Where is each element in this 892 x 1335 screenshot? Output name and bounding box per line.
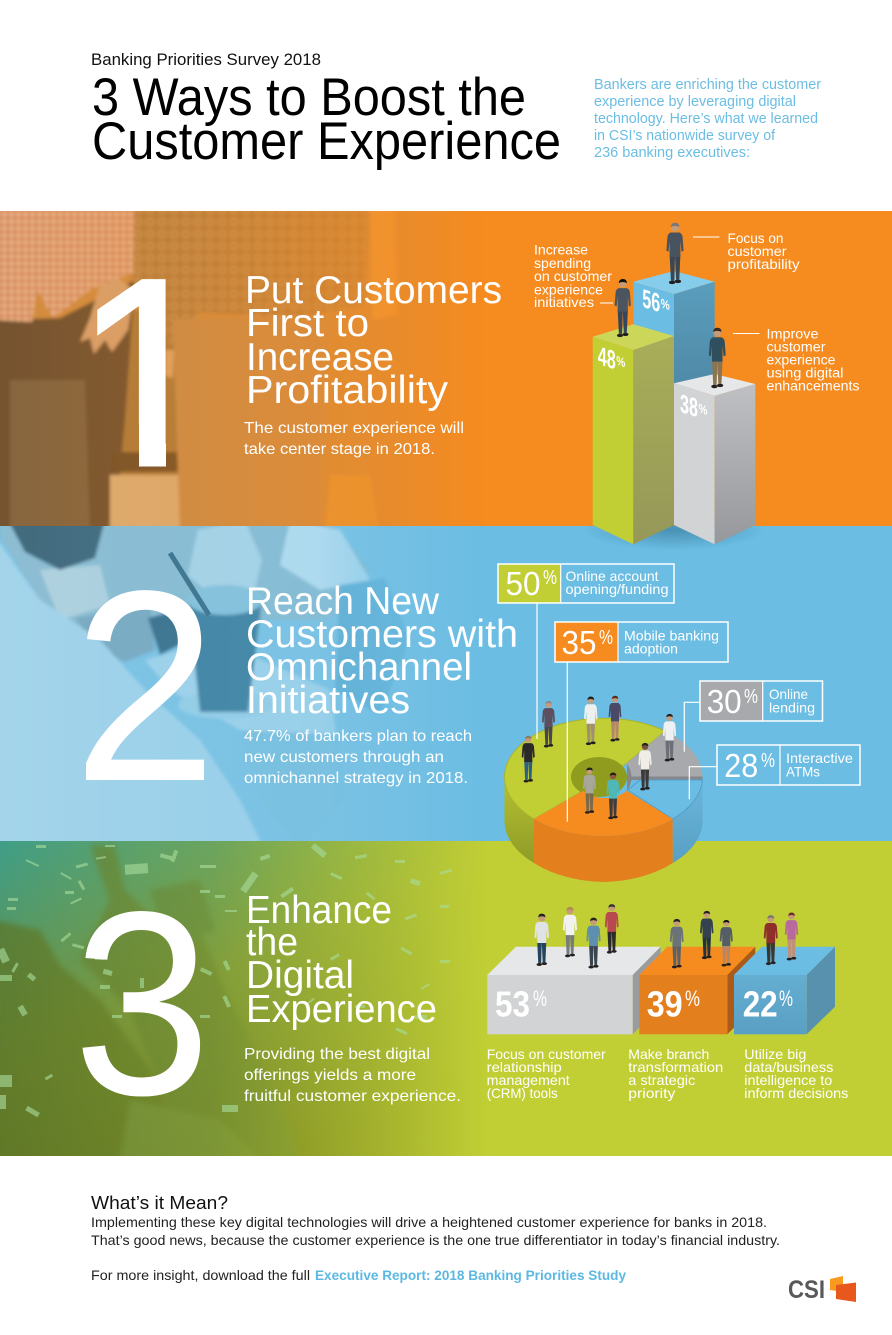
panel: section 3 green bbox=[0, 841, 892, 1160]
heading 1: Increase bbox=[246, 336, 394, 379]
caption: big data bbox=[744, 1046, 848, 1101]
block: 53 percent grey bbox=[487, 947, 661, 1034]
callout: 28 percent: Interactive bbox=[786, 750, 853, 766]
bar: 48 percent green: % bbox=[616, 353, 625, 370]
panel: section 2 blue bbox=[0, 520, 892, 850]
heading 1 bbox=[245, 269, 502, 412]
footer heading: What’s it Mean? bbox=[91, 1193, 228, 1213]
subheading 2: new customers through an bbox=[244, 749, 444, 766]
heading 3: the bbox=[246, 921, 298, 964]
callout: 30 percent: % bbox=[744, 686, 758, 708]
heading 2: Reach New bbox=[246, 580, 440, 623]
confetti bbox=[0, 843, 452, 1117]
caption: CRM tools: (CRM) tools bbox=[487, 1085, 558, 1101]
heading 2 bbox=[246, 580, 518, 722]
callout: focus on profitability: Focus on bbox=[728, 230, 784, 246]
numeral 3: 3 bbox=[73, 857, 211, 1150]
people on pie bbox=[522, 696, 676, 819]
pie hole bbox=[571, 757, 632, 797]
title bbox=[92, 68, 561, 171]
callout: 35 percent: 35 bbox=[562, 624, 596, 661]
bar: 38 percent grey: % bbox=[698, 401, 708, 418]
person: woman on green bar bbox=[615, 279, 631, 337]
pie chart: section 2 bbox=[498, 564, 860, 882]
heading 3: Experience bbox=[246, 988, 437, 1031]
heading 1: Profitability bbox=[246, 369, 449, 412]
callout: 50 percent: Online account bbox=[566, 568, 659, 584]
caption: branch transformation: Make branch bbox=[628, 1046, 709, 1062]
intro text: Bankers are enriching the customer bbox=[594, 77, 821, 93]
intro text: 236 banking executives: bbox=[594, 145, 750, 161]
caption: big data: intelligence to bbox=[744, 1072, 833, 1088]
footer body: Implementing these key digital technologies will drive a heightened customer experience for banks in 2018. bbox=[91, 1214, 767, 1230]
subheading 3: Providing the best digital bbox=[244, 1046, 430, 1063]
callout: 30 percent bbox=[700, 681, 822, 721]
call to action: Executive Report: 2018 Banking Priorities Study bbox=[315, 1267, 626, 1283]
caption: big data: inform decisions bbox=[744, 1085, 848, 1101]
bar: 56 percent blue bbox=[633, 271, 715, 400]
caption: branch transformation: transformation bbox=[628, 1059, 723, 1075]
caption: big data: data/business bbox=[744, 1059, 833, 1075]
panel: section 1 orange bbox=[0, 205, 892, 535]
intro text: experience by leveraging digital bbox=[594, 94, 796, 110]
callout: increase spending: spending bbox=[534, 255, 591, 271]
heading 3: Enhance bbox=[246, 889, 392, 932]
subheading 2 bbox=[244, 728, 472, 787]
subheading 1 bbox=[244, 420, 464, 458]
heading 1: Put Customers bbox=[245, 269, 502, 312]
heading 2: Customers with bbox=[246, 613, 518, 656]
intro text: in CSI’s nationwide survey of bbox=[594, 128, 776, 144]
caption: CRM tools: relationship bbox=[487, 1059, 562, 1075]
header bbox=[91, 50, 821, 171]
logo: CSI: CSI bbox=[788, 1276, 825, 1304]
heading 1: First to bbox=[246, 302, 369, 345]
callout: 50 percent: 50 bbox=[506, 565, 540, 602]
subheading 1: take center stage in 2018. bbox=[244, 441, 435, 458]
block: 53 percent grey: % bbox=[533, 986, 547, 1011]
intro text: technology. Here’s what we learned bbox=[594, 111, 818, 127]
intro text bbox=[594, 77, 821, 161]
heading 2: Initiatives bbox=[246, 679, 410, 722]
block: 39 percent orange: 39 bbox=[647, 984, 683, 1024]
callout: increase spending: Increase bbox=[534, 242, 588, 258]
block: 53 percent grey: 53 bbox=[495, 984, 530, 1024]
connector lines bbox=[537, 603, 717, 822]
callout: 28 percent: 28 bbox=[724, 747, 758, 784]
pie body bbox=[504, 777, 702, 882]
photo backdrop: two people standing bbox=[0, 205, 892, 535]
footer bbox=[91, 1193, 856, 1304]
callout: 30 percent: lending bbox=[769, 700, 815, 716]
block: 39 percent orange: % bbox=[685, 986, 700, 1011]
block: 22 percent blue: 22 bbox=[743, 984, 778, 1024]
callout: increase spending: initiatives bbox=[534, 294, 594, 310]
subheading 3: fruitful customer experience. bbox=[244, 1088, 461, 1105]
callout: 50 percent bbox=[498, 564, 674, 603]
callout: improve experience: experience bbox=[766, 352, 836, 368]
survey label: Banking Priorities Survey 2018 bbox=[91, 50, 321, 69]
subheading 3 bbox=[244, 1046, 461, 1105]
callout: increase spending: experience bbox=[534, 282, 603, 298]
caption: CRM tools: management bbox=[487, 1072, 570, 1088]
callout: focus on profitability bbox=[693, 230, 800, 272]
callout: focus on profitability: profitability bbox=[728, 256, 800, 272]
callout: 50 percent: % bbox=[543, 567, 557, 589]
pie slice: 35 percent orange bbox=[534, 791, 673, 836]
subheading 3: offerings yields a more bbox=[244, 1067, 416, 1084]
heading 2: Omnichannel bbox=[246, 646, 472, 689]
callout: 35 percent: Mobile banking bbox=[624, 628, 719, 644]
bar: 56 percent blue: % bbox=[661, 296, 670, 313]
call to action: For more insight, download the full bbox=[91, 1267, 310, 1283]
subheading 2: omnichannel strategy in 2018. bbox=[244, 770, 468, 787]
callout: 28 percent: % bbox=[761, 750, 775, 772]
photo backdrop: confetti crowd bbox=[0, 841, 892, 1160]
callout: improve experience bbox=[733, 326, 860, 394]
footer body bbox=[91, 1214, 780, 1248]
block: 22 percent blue bbox=[734, 947, 835, 1034]
callout: 28 percent: ATMs bbox=[786, 764, 820, 780]
person: man on blue bar bbox=[666, 223, 684, 284]
bar: 38 percent grey: 38 bbox=[680, 388, 698, 423]
callout: increase spending bbox=[534, 242, 613, 310]
title: 3 Ways to Boost the bbox=[92, 68, 526, 127]
base shadow bbox=[584, 510, 764, 550]
numeral 2: 2 bbox=[73, 534, 217, 838]
caption: CRM tools bbox=[487, 1046, 606, 1101]
people on blocks bbox=[534, 904, 798, 969]
subheading 1: The customer experience will bbox=[244, 420, 464, 437]
caption: CRM tools: Focus on customer bbox=[487, 1046, 606, 1062]
bar: 56 percent blue: 56 bbox=[642, 283, 660, 318]
bar: 48 percent green bbox=[593, 324, 674, 544]
pie slice: 28 percent blue bbox=[628, 780, 702, 819]
callout: improve experience: using digital bbox=[766, 364, 844, 380]
callout: increase spending: on customer bbox=[534, 268, 612, 284]
caption: branch transformation bbox=[628, 1046, 723, 1101]
block: 22 percent blue: % bbox=[779, 986, 793, 1011]
callout: 35 percent bbox=[555, 622, 728, 662]
pie slice: 50 percent green bbox=[504, 718, 665, 819]
callout: 30 percent: Online bbox=[769, 686, 808, 702]
block chart: section 3 bbox=[487, 904, 848, 1101]
callout: improve experience: enhancements bbox=[766, 378, 860, 394]
heading 3 bbox=[246, 889, 437, 1031]
caption: big data: Utilize big bbox=[744, 1046, 806, 1062]
title: Customer Experience bbox=[92, 112, 561, 171]
person: man on grey bar bbox=[709, 328, 726, 388]
callout: 28 percent bbox=[717, 745, 860, 785]
photo backdrop: coffee and phone bbox=[0, 520, 892, 850]
heading 3: Digital bbox=[246, 954, 354, 997]
subheading 2: 47.7% of bankers plan to reach bbox=[244, 728, 472, 745]
pie slice: 30 percent grey bbox=[627, 731, 702, 780]
callout: 35 percent: % bbox=[599, 627, 613, 649]
callout: improve experience: customer bbox=[766, 338, 826, 354]
block: 39 percent orange bbox=[639, 947, 755, 1034]
callout: 50 percent: opening/funding bbox=[566, 581, 668, 597]
callout: focus on profitability: customer bbox=[728, 243, 787, 259]
caption: branch transformation: a strategic bbox=[628, 1072, 695, 1088]
bar chart: section 1 bbox=[534, 223, 860, 550]
callout: 30 percent: 30 bbox=[707, 683, 742, 720]
footer body: That’s good news, because the customer experience is the one true differentiator in today’s financial industry. bbox=[91, 1232, 780, 1248]
call to action bbox=[91, 1267, 626, 1283]
bar: 48 percent green: 48 bbox=[598, 341, 616, 375]
logo: CSI bbox=[788, 1276, 856, 1304]
callout: 35 percent: adoption bbox=[624, 640, 678, 656]
numeral 1: 1 bbox=[73, 222, 222, 522]
bar: 38 percent grey bbox=[674, 374, 755, 544]
caption: branch transformation: priority bbox=[628, 1085, 675, 1101]
callout: improve experience: Improve bbox=[766, 326, 819, 342]
